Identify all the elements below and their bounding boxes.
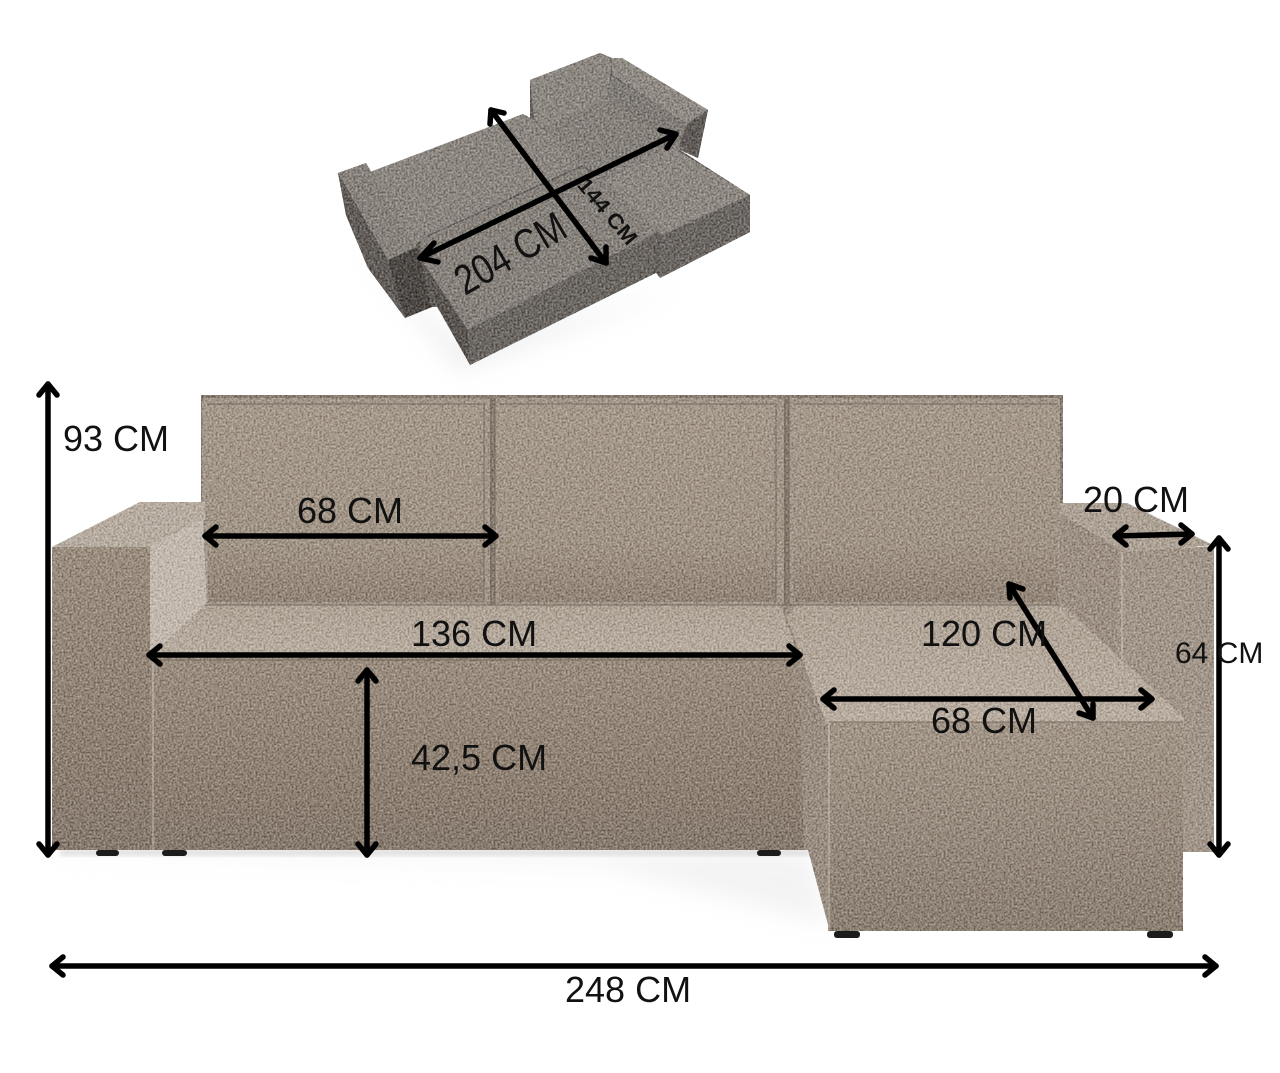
arrow: 64 cm [1210, 538, 1228, 855]
label: 64 CM: 64 CM [1175, 637, 1263, 670]
arrow: 136 cm [149, 646, 800, 664]
label: 248 CM: 248 CM [565, 969, 691, 1010]
chaise front [828, 722, 1183, 931]
right arm inner [606, 75, 687, 150]
chaise side [780, 604, 830, 932]
arrow: 68 cm cushion [205, 527, 496, 545]
label: 144 CM: 144 CM [572, 174, 642, 250]
label: 68 CM chaise: 68 CM [931, 700, 1037, 741]
arrow: 42,5 cm [358, 670, 376, 855]
right arm top [612, 58, 708, 124]
seams [150, 398, 1183, 722]
label: 68 CM cushion: 68 CM [297, 490, 403, 531]
left arm inner face [146, 518, 207, 850]
back cushion 1 [202, 398, 490, 606]
left arm front [52, 547, 150, 850]
back cushion 3 [789, 398, 1060, 606]
main seat [370, 114, 582, 247]
extension front [468, 232, 658, 365]
arrow: 204 cm [420, 130, 676, 262]
arrow: 248 cm width [52, 957, 1216, 975]
back cushion [530, 53, 612, 128]
chaise [604, 148, 750, 237]
left arm top [52, 502, 205, 551]
right arm end [678, 110, 708, 158]
right arm inner face [1060, 513, 1124, 666]
left arm [338, 163, 417, 260]
arrow: 20 cm [1115, 525, 1192, 545]
floor shadow [60, 250, 830, 925]
right arm top [1060, 503, 1213, 554]
arrow: 93 cm height [39, 384, 57, 855]
arrow: 68 cm chaise [823, 690, 1152, 708]
arrow: 144 cm [490, 110, 606, 263]
label: 136 CM: 136 CM [411, 613, 537, 654]
label: 20 CM: 20 CM [1083, 479, 1189, 520]
seat top [148, 605, 802, 658]
label: 204 CM: 204 CM [446, 203, 574, 304]
label: 42,5 CM: 42,5 CM [411, 737, 547, 778]
main sofa [52, 395, 1214, 938]
silhouette base [338, 53, 750, 365]
label: 93 CM: 93 CM [63, 418, 169, 459]
arrow: 120 cm [1009, 584, 1093, 718]
top view sofa: bed extended [338, 53, 750, 365]
back seat [542, 100, 684, 180]
seat front [149, 656, 807, 850]
back cushion 2 [495, 398, 784, 606]
chaise top [787, 605, 1184, 724]
right arm front [1116, 546, 1214, 852]
backrest base [201, 395, 1063, 609]
sofa feet [96, 850, 1173, 938]
extension top [420, 167, 658, 330]
label: 120 CM: 120 CM [921, 613, 1047, 654]
